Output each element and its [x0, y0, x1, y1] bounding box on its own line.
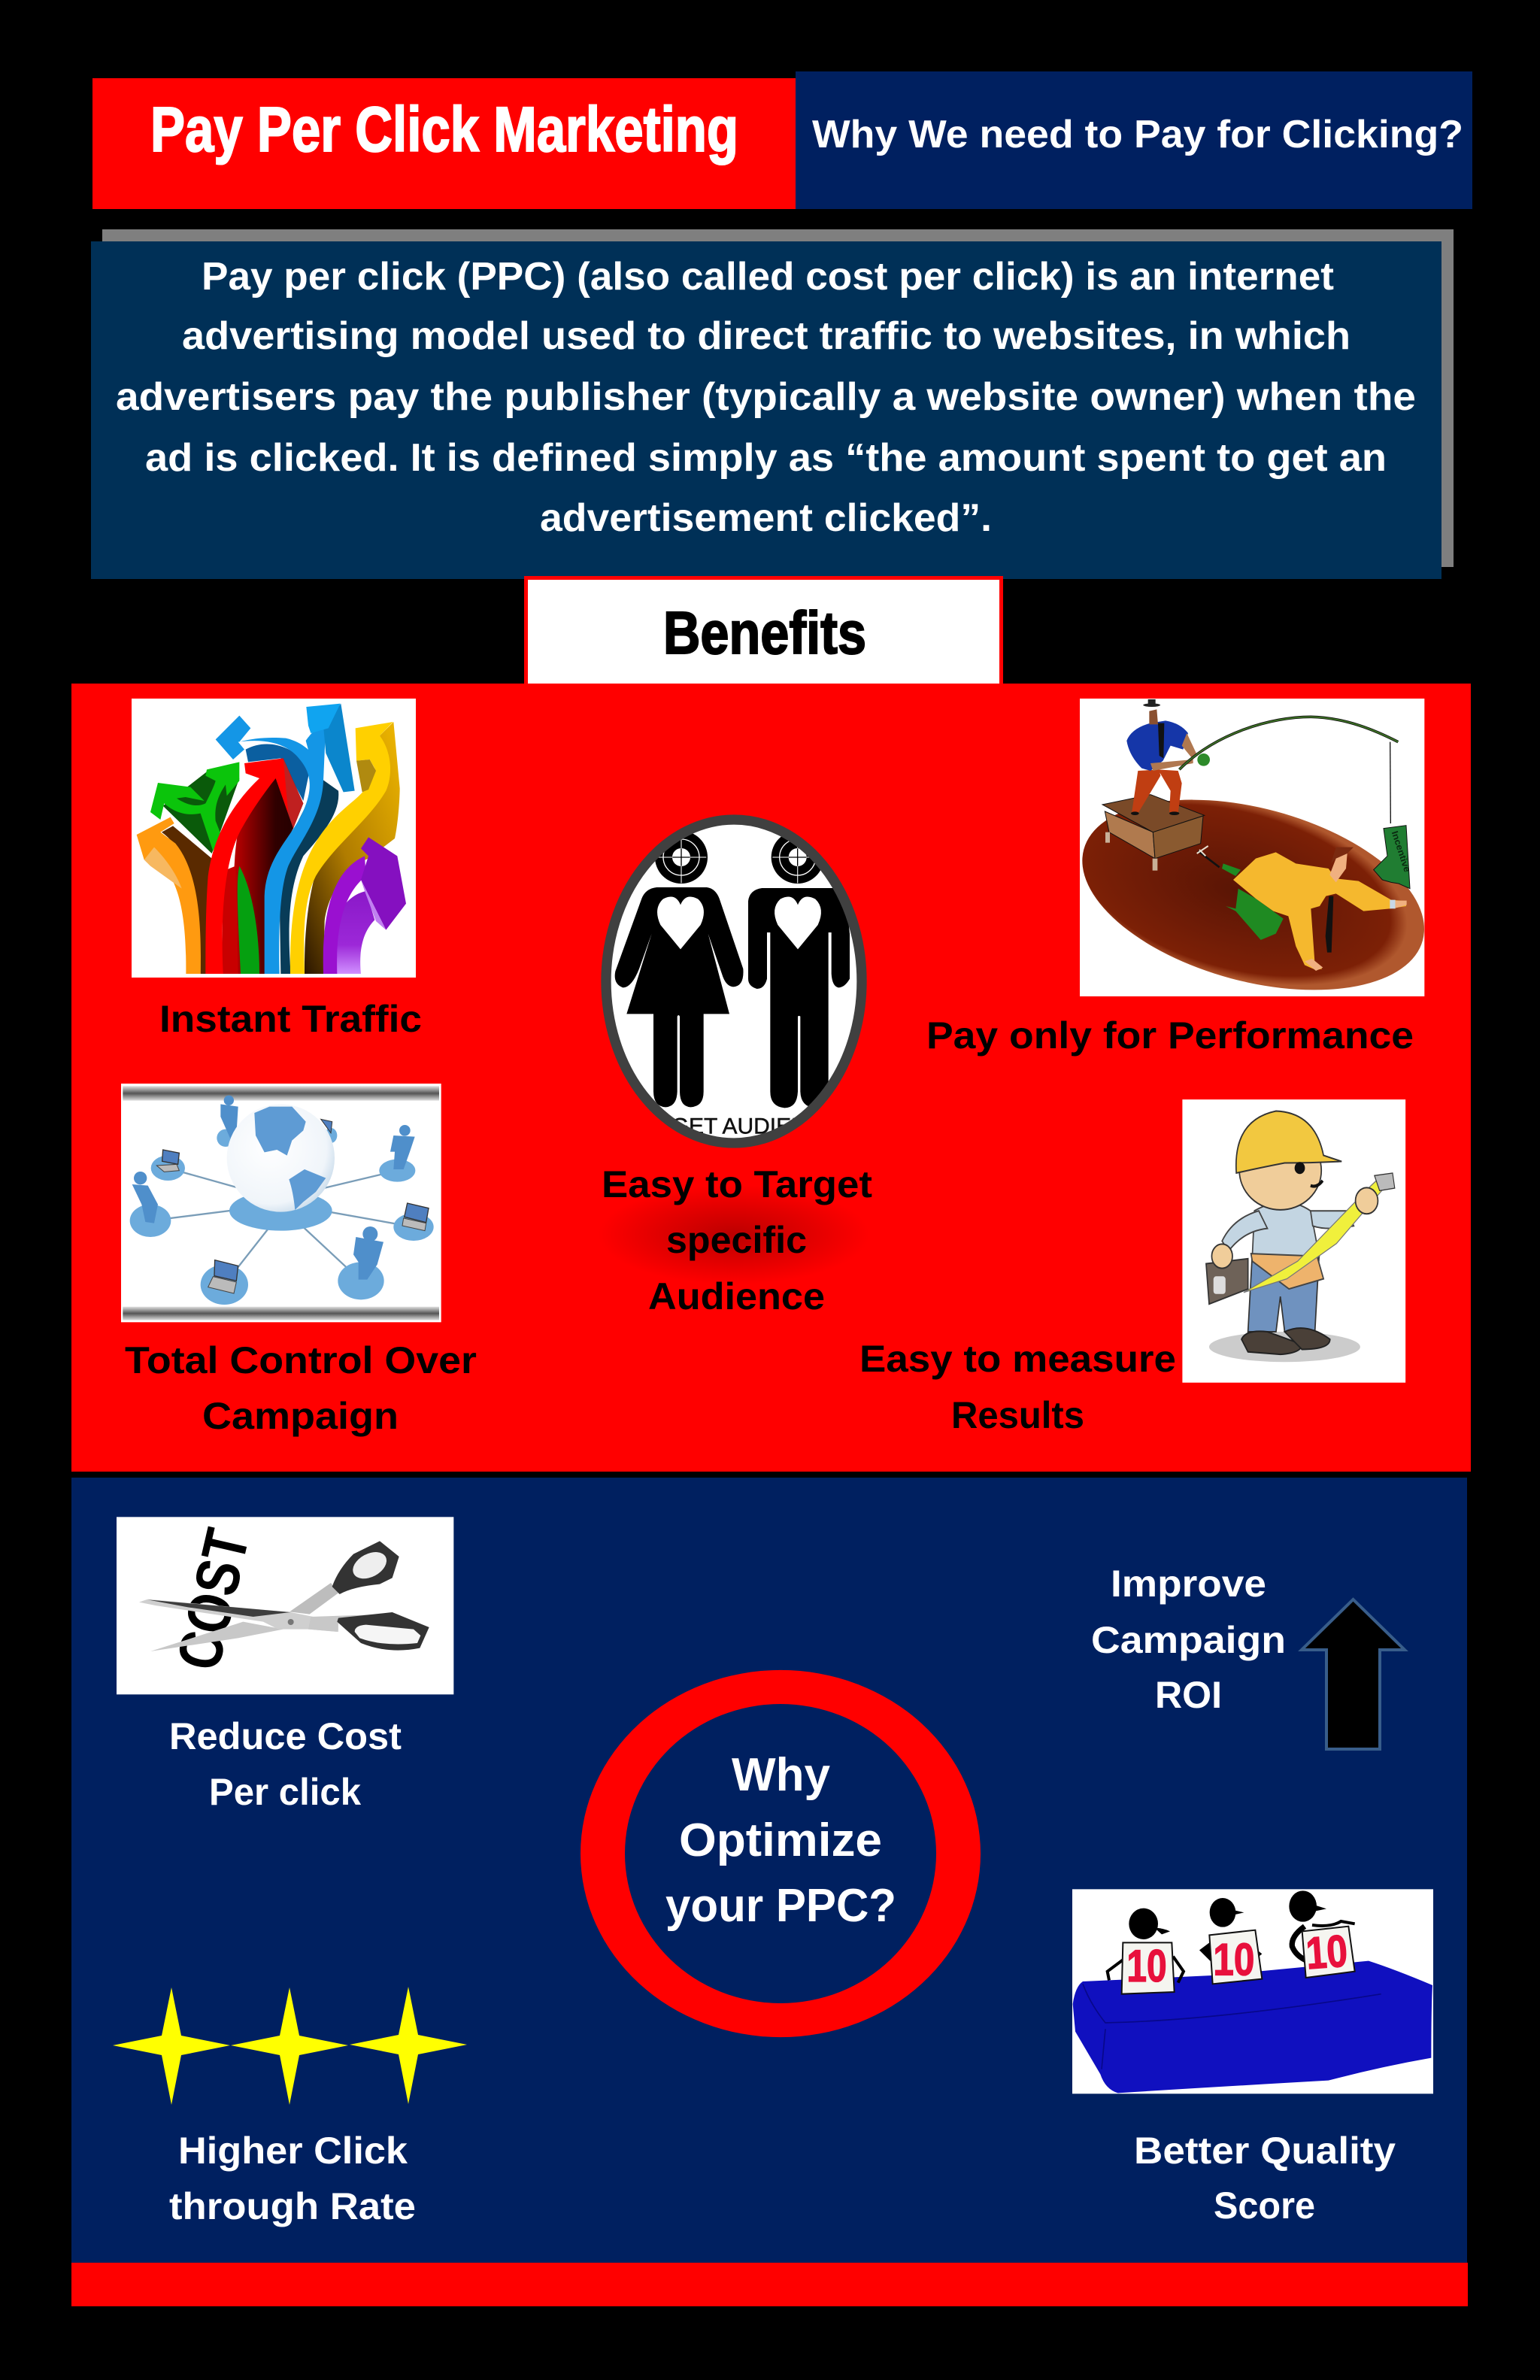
label: easy to target specific audience — [599, 1163, 872, 1317]
panel: benefits — [71, 684, 1471, 1472]
label: higher click through rate — [169, 2130, 416, 2227]
label: better quality score: Better Quality — [1134, 2130, 1396, 2172]
label: better quality score: Score — [1214, 2184, 1315, 2227]
header: title — [92, 78, 796, 209]
panel: definition: advertisement clicked”. — [540, 496, 992, 540]
label: reduce cost per click: Reduce Cost — [169, 1715, 402, 1757]
icon: up arrow — [1302, 1599, 1405, 1749]
panel: definition — [91, 229, 1454, 579]
label: improve campaign roi — [1091, 1563, 1286, 1716]
center ring: why optimize your ppc: Why — [732, 1749, 831, 1801]
icon: judges scoring ten — [1072, 1889, 1433, 2093]
icon: judges scoring ten: 10 — [1213, 1935, 1254, 1985]
panel: definition: Pay per click (PPC) (also called cost per click) is an internet — [202, 255, 1334, 299]
label: easy to measure results — [859, 1338, 1176, 1436]
label: reduce cost per click — [169, 1715, 402, 1813]
label: easy to measure results: Results — [951, 1394, 1084, 1436]
bottom red bar — [71, 2263, 1468, 2306]
heading: benefits — [526, 578, 1002, 687]
icon: target audience oval — [606, 820, 862, 1143]
label: higher click through rate: through Rate — [169, 2185, 416, 2227]
icon: colourful arrows — [132, 699, 416, 978]
panel: definition: advertising model used to direct traffic to websites, in which — [182, 314, 1351, 358]
center ring: why optimize your ppc: your PPC? — [665, 1880, 896, 1932]
panel: definition: advertisers pay the publisher (typically a website owner) when the — [116, 375, 1416, 419]
label: total control over campaign: Campaign — [202, 1395, 399, 1437]
icon: worker with measuring tape — [1182, 1099, 1405, 1383]
center ring: why optimize your ppc: Optimize — [679, 1815, 882, 1866]
icon: fishing for performance — [1062, 699, 1445, 1023]
label: easy to measure results: Easy to measure — [859, 1338, 1176, 1380]
heading: benefits: Benefits — [663, 599, 866, 666]
label: instant traffic: Instant Traffic — [159, 998, 422, 1040]
label: total control over campaign: Total Control Over — [125, 1339, 477, 1381]
icon: scissors cutting cost — [117, 1517, 453, 1694]
icon: target audience oval: TARGET AUDIENCE — [628, 1114, 838, 1139]
label: improve campaign roi: Improve — [1111, 1563, 1266, 1605]
panel: definition: ad is clicked. It is defined simply as “the amount spent to get an — [145, 436, 1387, 480]
header: subtitle: Why We need to Pay for Clicking? — [812, 113, 1463, 156]
icon: fishing for performance: Incentive — [1390, 829, 1413, 874]
label: easy to target specific audience: Audience — [648, 1275, 825, 1317]
icon: globe network — [121, 1084, 441, 1322]
label: better quality score — [1134, 2130, 1396, 2227]
panel: why optimize — [71, 1478, 1468, 2306]
icon: scissors cutting cost: COST — [164, 1523, 262, 1676]
icon: judges scoring ten: 10 — [1126, 1941, 1167, 1991]
label: reduce cost per click: Per click — [209, 1771, 361, 1813]
label: easy to target specific audience: Easy to Target — [602, 1163, 872, 1205]
label: pay only for performance: Pay only for Performance — [926, 1014, 1414, 1057]
label: easy to target specific audience: specific — [666, 1219, 807, 1261]
label: higher click through rate: Higher Click — [178, 2130, 408, 2172]
header: title: Pay Per Click Marketing — [150, 94, 738, 165]
icon: judges scoring ten: 10 — [1305, 1926, 1349, 1978]
label: improve campaign roi: ROI — [1155, 1674, 1222, 1716]
label: total control over campaign — [125, 1339, 477, 1437]
label: improve campaign roi: Campaign — [1091, 1619, 1286, 1661]
center ring: why optimize your ppc — [581, 1670, 981, 2037]
header: subtitle — [796, 71, 1472, 209]
icon: three yellow stars — [113, 1987, 467, 2105]
